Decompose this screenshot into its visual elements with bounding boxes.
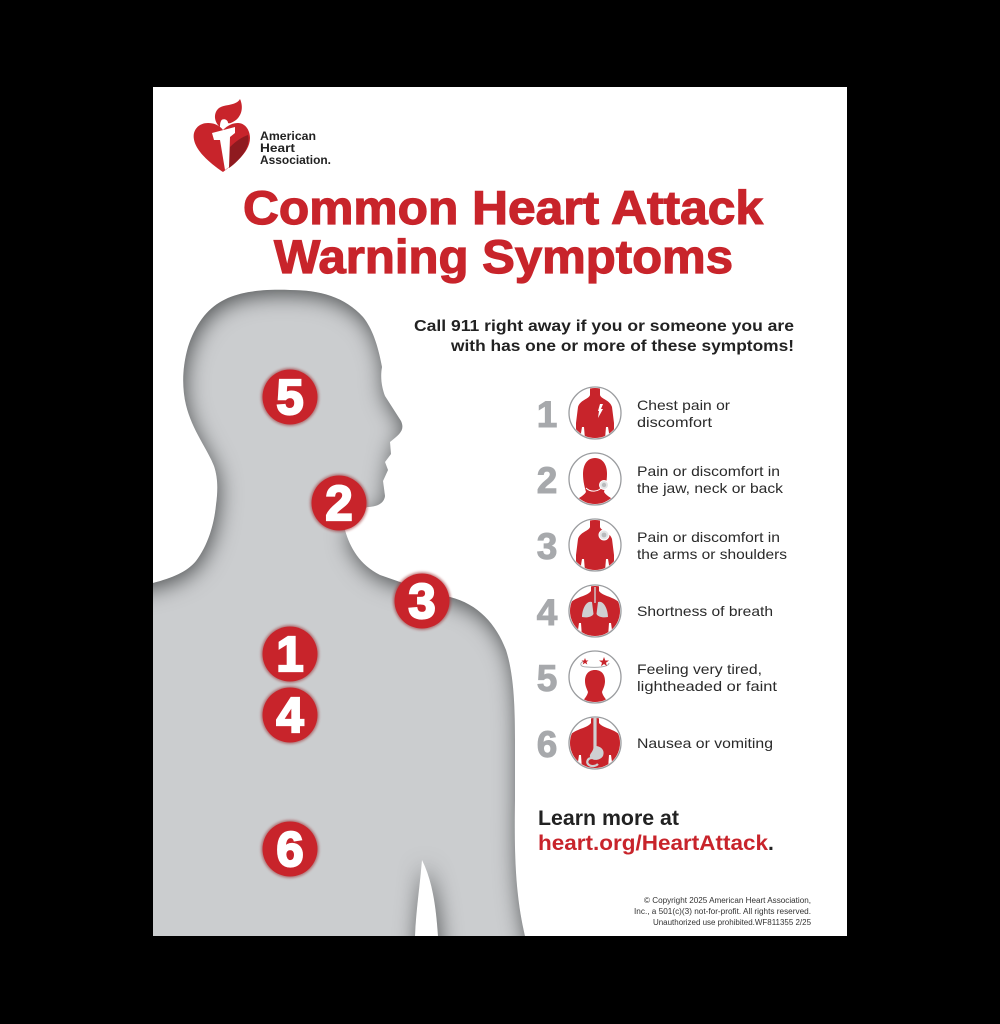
copyright: © Copyright 2025 American Heart Association, <box>644 896 811 905</box>
logo wordmark: Heart <box>260 141 295 155</box>
body marker 3 <box>393 572 451 630</box>
learn more link: . <box>768 832 774 855</box>
symptom 6: 6 <box>537 724 557 765</box>
symptom 6 <box>537 716 773 770</box>
body marker 3: 3 <box>408 575 436 629</box>
icon: dizzy head with stars <box>569 651 621 704</box>
icon: jaw and neck pain <box>569 453 621 506</box>
symptom 2 <box>537 453 784 506</box>
body silhouette <box>153 290 525 936</box>
symptom 4 <box>537 584 773 638</box>
icon: arm and shoulder pain <box>569 518 621 572</box>
symptom 3 <box>537 518 787 572</box>
body marker 2: 2 <box>325 477 353 531</box>
logo wordmark <box>260 129 331 167</box>
title: Common Heart Attack <box>243 181 764 234</box>
symptom 3: the arms or shoulders <box>637 546 787 562</box>
symptom 5 <box>537 651 777 704</box>
symptom 1: Chest pain or <box>637 397 730 413</box>
symptom 3: 3 <box>537 526 557 567</box>
icon: lungs <box>568 584 622 638</box>
title: Warning Symptoms <box>274 230 733 283</box>
copyright <box>634 896 812 927</box>
symptom 2: Pain or discomfort in <box>637 463 780 479</box>
symptom 1: discomfort <box>637 414 712 430</box>
symptom 3: Pain or discomfort in <box>637 529 780 545</box>
body marker 4: 4 <box>276 689 304 743</box>
page background <box>153 87 847 936</box>
learn more link: heart.org/HeartAttack <box>538 832 768 855</box>
logo: American Heart Association <box>194 99 331 172</box>
logo wordmark: Association. <box>260 153 331 167</box>
learn more link: Learn more at <box>538 807 679 830</box>
symptom 1: 1 <box>537 394 557 435</box>
body marker 1: 1 <box>276 628 304 682</box>
symptom 2: the jaw, neck or back <box>637 480 784 496</box>
body marker 5 <box>261 368 319 426</box>
icon: heart and torch <box>194 99 250 172</box>
body marker 4 <box>261 686 319 744</box>
body marker 2 <box>310 474 368 532</box>
body marker 5: 5 <box>276 371 304 425</box>
learn more link <box>538 807 774 855</box>
symptom 6: Nausea or vomiting <box>637 735 773 751</box>
symptom 2: 2 <box>537 460 557 501</box>
title <box>243 181 764 283</box>
symptom 4: Shortness of breath <box>637 603 773 619</box>
copyright: Inc., a 501(c)(3) not-for-profit. All rights reserved. <box>634 907 811 916</box>
icon: stomach <box>568 716 622 770</box>
logo wordmark: American <box>260 129 316 143</box>
callout: call 911 <box>414 318 794 355</box>
symptom 5: 5 <box>537 658 557 699</box>
body marker 6: 6 <box>276 823 304 877</box>
symptom 1 <box>537 386 730 440</box>
body marker 6 <box>261 820 319 878</box>
copyright: Unauthorized use prohibited.WF811355 2/25 <box>653 918 812 927</box>
callout: call 911: with has one or more of these symptoms! <box>450 338 794 355</box>
body marker 1 <box>261 625 319 683</box>
symptom 4: 4 <box>537 592 558 633</box>
symptom 5: Feeling very tired, <box>637 661 762 677</box>
callout: call 911: Call 911 right away if you or someone you are <box>414 318 794 335</box>
icon: chest pain <box>569 386 621 440</box>
symptom 5: lightheaded or faint <box>637 678 777 694</box>
